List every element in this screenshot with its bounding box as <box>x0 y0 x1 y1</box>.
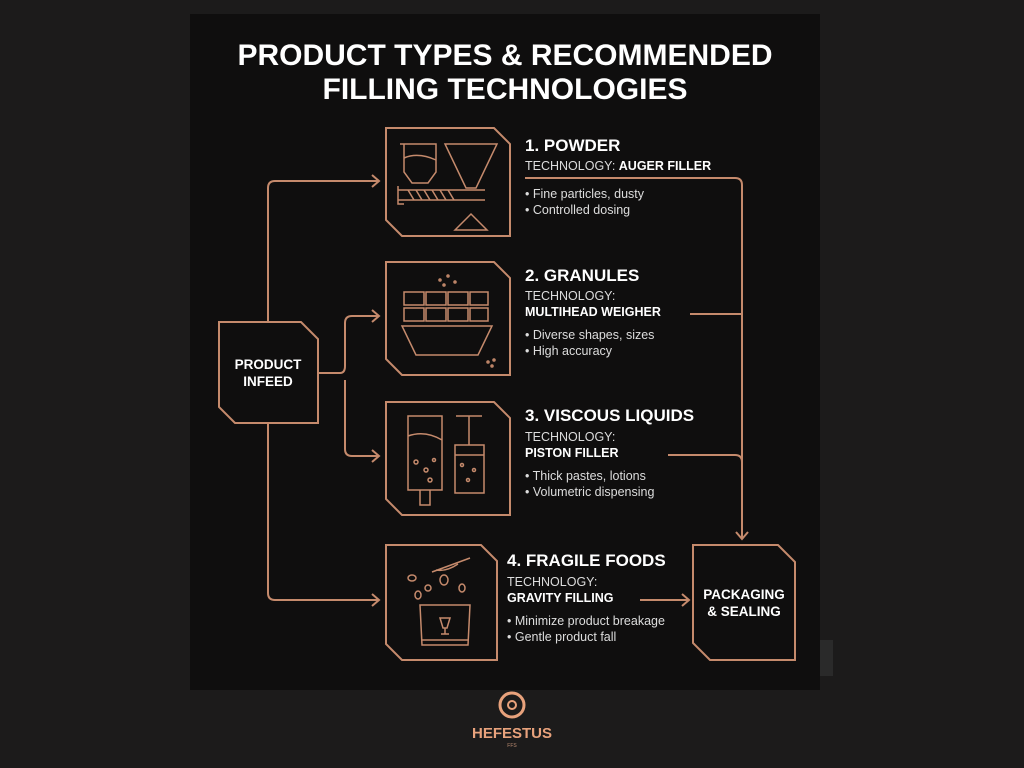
logo: hefestus: HEFESTUS <box>472 725 552 742</box>
box: packaging & sealing: PACKAGING <box>703 587 785 602</box>
text block 3: PISTON FILLER <box>525 446 619 460</box>
box: packaging & sealing <box>693 545 795 660</box>
box: packaging & sealing: & SEALING <box>707 604 781 619</box>
text block 4: TECHNOLOGY: <box>507 575 597 589</box>
icon box 1: powder auger <box>386 128 510 236</box>
text block 3: • Volumetric dispensing <box>525 485 654 499</box>
title: PRODUCT TYPES & RECOMMENDED <box>237 39 773 72</box>
text block 4: GRAVITY FILLING <box>507 591 613 605</box>
text block 3: 3. VISCOUS LIQUIDS <box>525 406 694 425</box>
text block 2: 2. GRANULES <box>525 266 639 285</box>
connector lines <box>268 175 748 606</box>
box: product infeed <box>219 322 318 423</box>
title <box>237 39 773 106</box>
text block 2: MULTIHEAD WEIGHER <box>525 305 661 319</box>
text block 4: 4. FRAGILE FOODS <box>507 551 666 570</box>
text block 2: TECHNOLOGY: <box>525 289 615 303</box>
text block 1: • Controlled dosing <box>525 203 630 217</box>
text block 4 <box>507 551 666 644</box>
text block 2: • Diverse shapes, sizes <box>525 328 654 342</box>
text block 2 <box>525 266 661 358</box>
logo: hefestus: FFS <box>507 743 517 749</box>
text block 1: • Fine particles, dusty <box>525 187 645 201</box>
icon box 4: fragile foods <box>386 545 497 660</box>
main panel <box>190 14 820 690</box>
logo: hefestus <box>472 693 552 749</box>
box: product infeed: PRODUCT <box>235 357 302 372</box>
title: FILLING TECHNOLOGIES <box>322 73 688 106</box>
text block 4: • Gentle product fall <box>507 630 616 644</box>
text block 3: TECHNOLOGY: <box>525 430 615 444</box>
text block 1: 1. POWDER <box>525 136 620 155</box>
text block 1: TECHNOLOGY: AUGER FILLER <box>525 159 711 173</box>
text block 1 <box>525 136 711 217</box>
icon box 2: multihead weigher <box>386 262 510 375</box>
text block 3: • Thick pastes, lotions <box>525 469 646 483</box>
text block 3 <box>525 406 694 499</box>
text block 2: • High accuracy <box>525 344 613 358</box>
icon box 3: piston filler <box>386 402 510 515</box>
box: product infeed: INFEED <box>243 374 293 389</box>
text block 4: • Minimize product breakage <box>507 614 665 628</box>
